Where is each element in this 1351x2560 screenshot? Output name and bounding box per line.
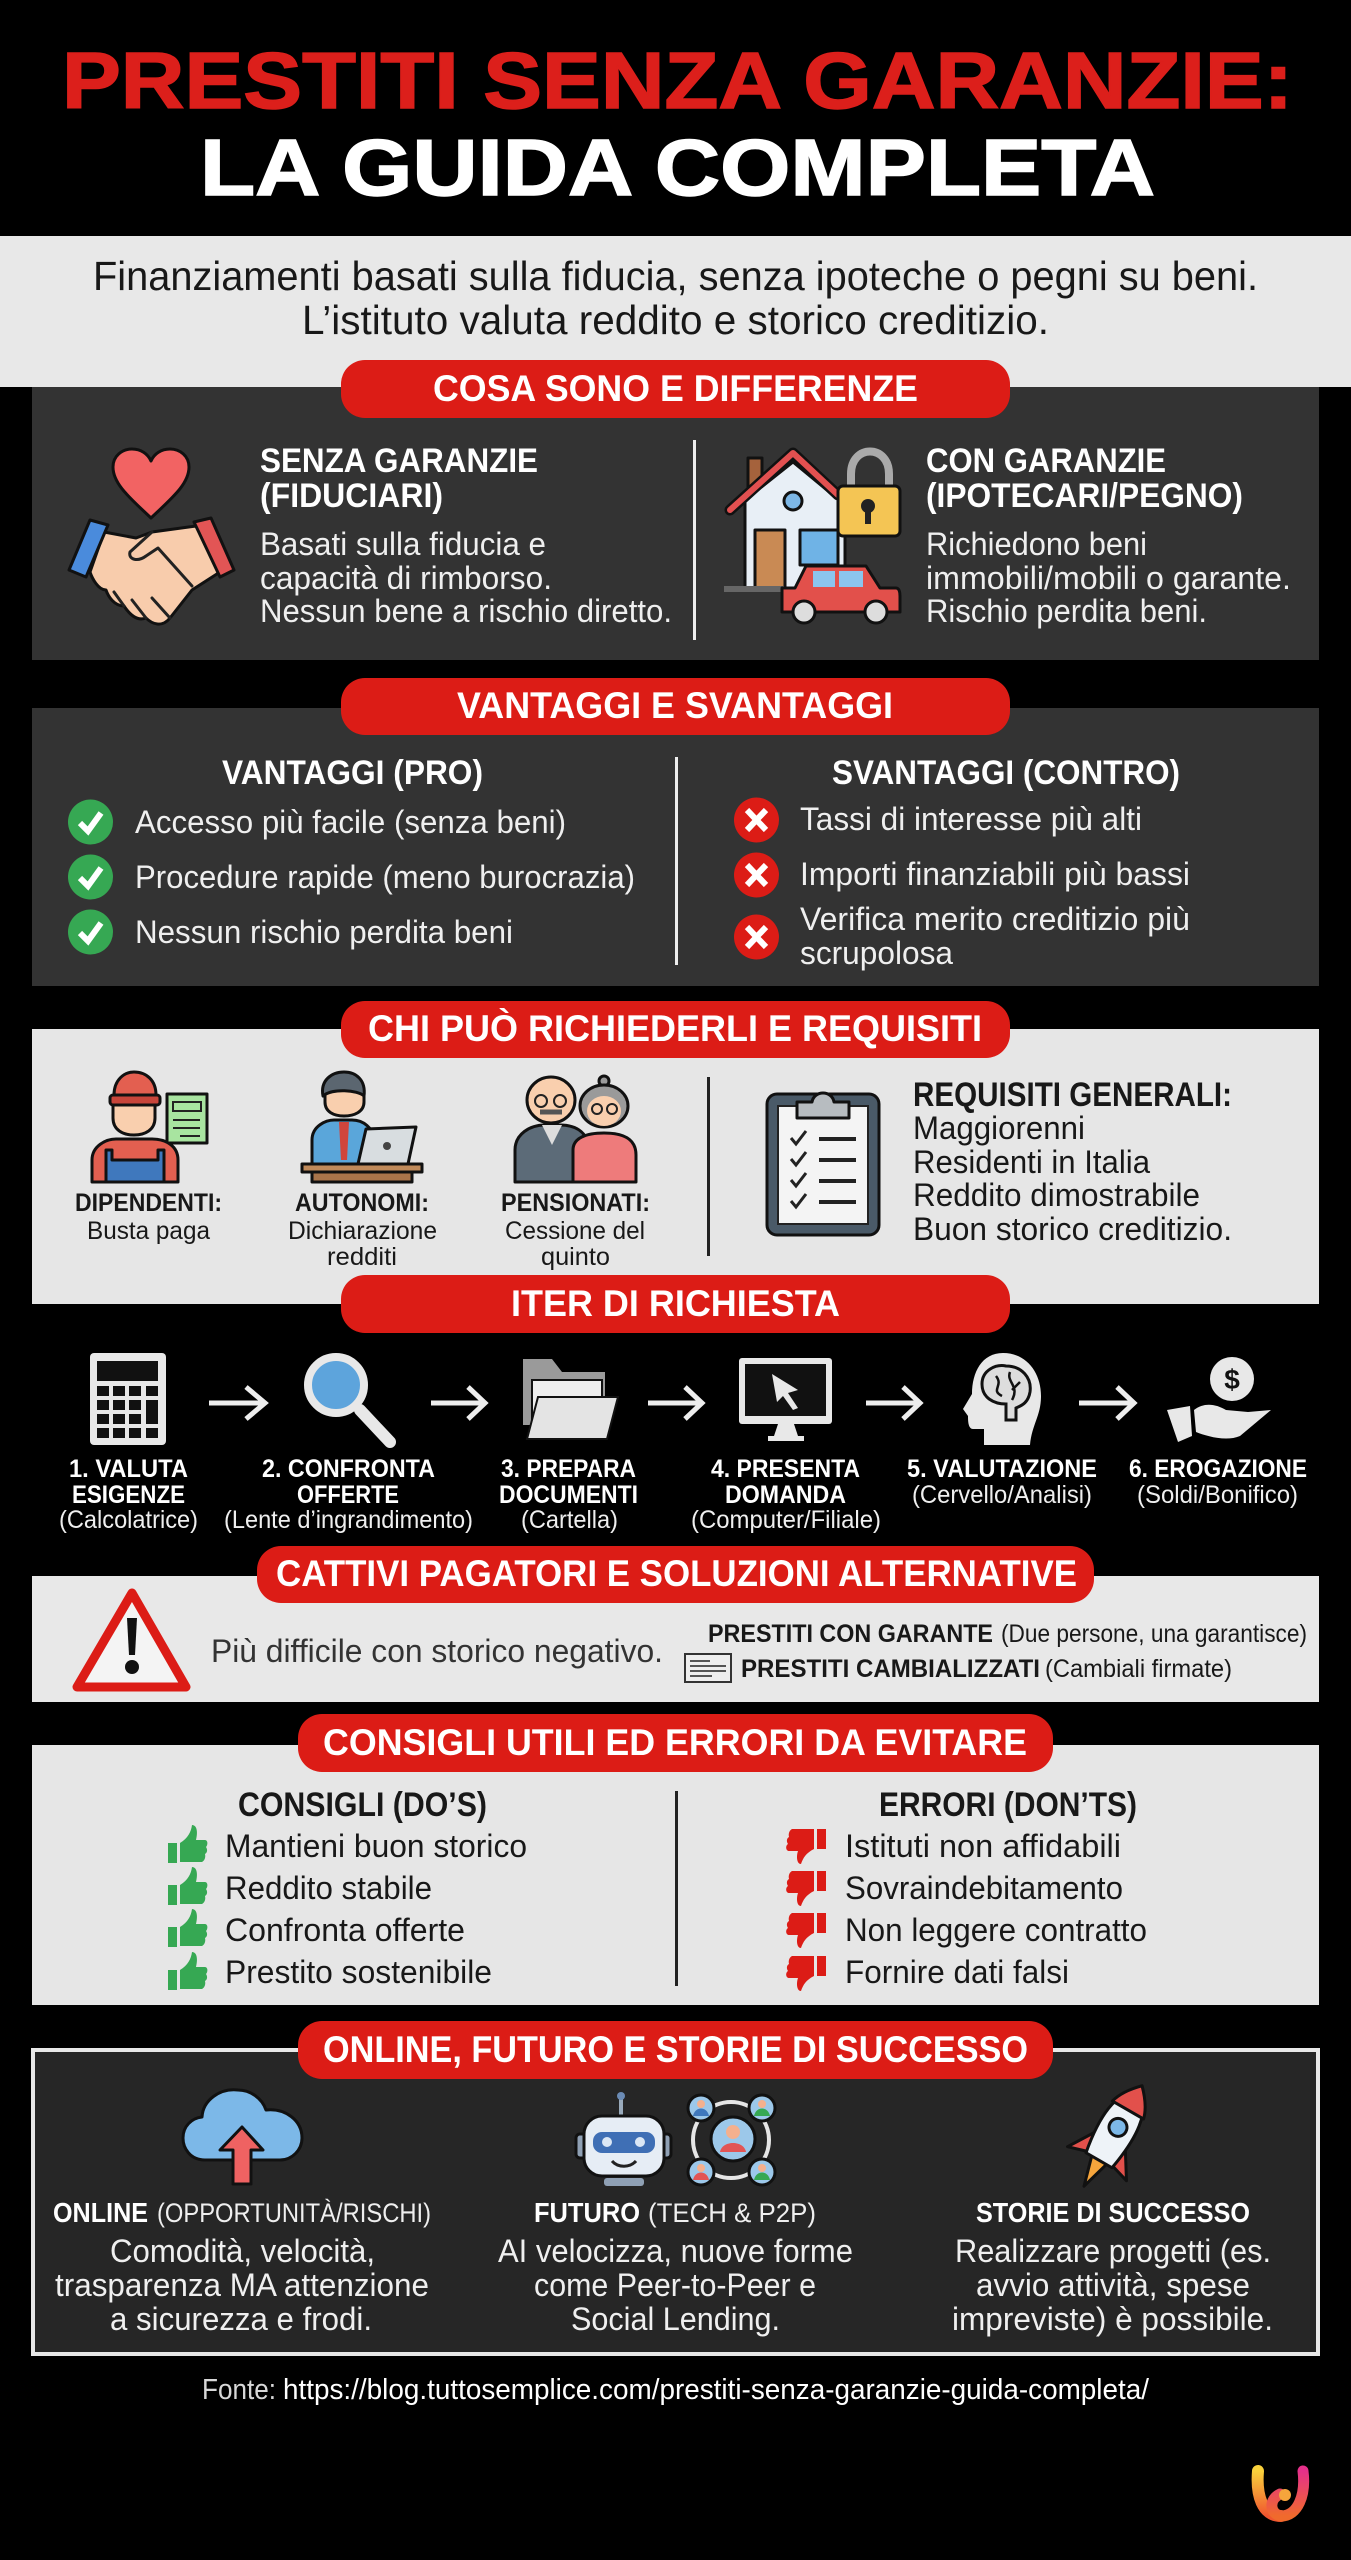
- icon: hand with coin: [1167, 1357, 1271, 1442]
- panel: online, futuro e storie di successo: [33, 2021, 1318, 2354]
- text: futuro: FUTURO: [534, 2197, 640, 2228]
- arrow: [648, 1387, 702, 1419]
- list: errori: Fornire dati falsi: [845, 1954, 1069, 1990]
- list: vantaggi: Accesso più facile (senza beni): [135, 804, 566, 840]
- arrow: [1079, 1387, 1134, 1419]
- step 4 label: DOMANDA: [725, 1481, 846, 1509]
- title: PRESTITI SENZA GARANZIE:: [62, 36, 1293, 125]
- panel: consigli utili ed errori da evitare: [32, 1714, 1319, 2005]
- list: errori: [786, 1786, 1147, 1991]
- source line: https://blog.tuttosemplice.com/prestiti-senza-garanzie-guida-completa/: [283, 2374, 1150, 2406]
- text: requisiti generali: Reddito dimostrabile: [913, 1177, 1200, 1213]
- heading pill: [341, 360, 1010, 418]
- text: requisiti generali: Buon storico creditizio.: [913, 1211, 1232, 1247]
- heading pill: ITER DI RICHIESTA: [511, 1283, 840, 1324]
- step 5 label: [907, 1455, 1097, 1509]
- heading pill: VANTAGGI E SVANTAGGI: [457, 685, 893, 726]
- icon: self-employed with laptop: [302, 1072, 422, 1182]
- list: svantaggi: [734, 754, 1190, 971]
- step 4 label: 4. PRESENTA: [711, 1455, 860, 1483]
- icon: computer: [739, 1358, 832, 1441]
- label: autonomi: Dichiarazione: [288, 1217, 437, 1245]
- icon: hand with coin: $: [1224, 1364, 1240, 1395]
- text: senza garanzie: (FIDUCIARI): [260, 477, 443, 515]
- text: storie di successo: STORIE DI SUCCESSO: [976, 2197, 1250, 2228]
- icon: head with brain: [963, 1353, 1041, 1445]
- label: pensionati: PENSIONATI:: [501, 1189, 650, 1217]
- text: con garanzie: Rischio perdita beni.: [926, 593, 1207, 629]
- heading pill: [257, 1546, 1094, 1603]
- subtitle band: L’istituto valuta reddito e storico creditizio.: [302, 297, 1049, 343]
- heading pill: CONSIGLI UTILI ED ERRORI DA EVITARE: [323, 1722, 1027, 1763]
- text: senza garanzie: [260, 442, 672, 629]
- step 5 label: (Cervello/Analisi): [912, 1481, 1092, 1509]
- step 1 label: ESIGENZE: [72, 1481, 185, 1509]
- icon: folder: [523, 1359, 618, 1439]
- heading pill: COSA SONO E DIFFERENZE: [433, 368, 918, 409]
- text: storie di successo: impreviste) è possibile.: [952, 2301, 1273, 2337]
- text: online: (OPPORTUNITÀ/RISCHI): [157, 2198, 431, 2228]
- icon: worker: [92, 1072, 207, 1182]
- label: pensionati: [501, 1189, 650, 1271]
- step 2 label: 2. CONFRONTA: [262, 1455, 435, 1483]
- arrow: [866, 1387, 920, 1419]
- text: futuro: Social Lending.: [571, 2301, 780, 2337]
- panel: cosa sono e differenze: [32, 360, 1319, 660]
- text: senza garanzie: SENZA GARANZIE: [260, 442, 538, 480]
- list: svantaggi: SVANTAGGI (CONTRO): [832, 754, 1180, 792]
- text: senza garanzie: Nessun bene a rischio diretto.: [260, 593, 672, 629]
- text: prestiti cambializzati: [741, 1655, 1232, 1683]
- list: consigli: Prestito sostenibile: [225, 1954, 492, 1990]
- icon: pensioners: [515, 1076, 636, 1182]
- text: prestiti con garante: (Due persone, una garantisce): [1001, 1620, 1307, 1648]
- text: storie di successo: avvio attività, spese: [976, 2267, 1250, 2303]
- heading pill: [298, 2021, 1053, 2079]
- list: errori: Istituti non affidabili: [845, 1828, 1121, 1864]
- text: requisiti generali: [913, 1076, 1232, 1247]
- text: senza garanzie: Basati sulla fiducia e: [260, 526, 546, 562]
- text: con garanzie: Richiedono beni: [926, 526, 1147, 562]
- heading pill: [341, 1275, 1010, 1333]
- section: iter di richiesta: [59, 1275, 1307, 1534]
- text: con garanzie: (IPOTECARI/PEGNO): [926, 477, 1243, 515]
- source line: Fonte:: [202, 2374, 276, 2406]
- list: svantaggi: scrupolosa: [800, 935, 953, 971]
- list: consigli: [168, 1786, 527, 1990]
- step 2 label: OFFERTE: [297, 1481, 399, 1509]
- text: storie di successo: Realizzare progetti (es.: [955, 2233, 1271, 2269]
- step 4 label: [691, 1455, 881, 1534]
- panel: chi può richiederli e requisiti: [32, 1001, 1319, 1304]
- label: dipendenti: DIPENDENTI:: [75, 1189, 222, 1217]
- label: dipendenti: Busta paga: [87, 1217, 210, 1245]
- icon: peer-to-peer network: [688, 2095, 775, 2185]
- icon: heart and handshake: [69, 449, 234, 624]
- text: online: a sicurezza e frodi.: [110, 2301, 372, 2337]
- icon: rocket: [1055, 2069, 1171, 2203]
- text: online: trasparenza MA attenzione: [55, 2267, 429, 2303]
- text: requisiti generali: Residenti in Italia: [913, 1144, 1150, 1180]
- step 6 label: (Soldi/Bonifico): [1137, 1481, 1298, 1509]
- step 2 label: (Lente d’ingrandimento): [224, 1506, 473, 1534]
- list: consigli: Confronta offerte: [225, 1912, 465, 1948]
- icon: house, padlock and car: [724, 452, 900, 623]
- icon: robot: [576, 2092, 671, 2186]
- text: futuro: AI velocizza, nuove forme: [498, 2233, 853, 2269]
- label: pensionati: Cessione del: [505, 1217, 645, 1245]
- step 5 label: 5. VALUTAZIONE: [907, 1455, 1097, 1483]
- step 4 label: (Computer/Filiale): [691, 1506, 881, 1534]
- text: futuro: come Peer-to-Peer e: [534, 2267, 816, 2303]
- text: online: [53, 2197, 431, 2337]
- text: prestiti con garante: [708, 1620, 1307, 1648]
- list: vantaggi: Procedure rapide (meno burocrazia): [135, 859, 635, 895]
- icon: clipboard: [767, 1093, 879, 1235]
- subtitle band: Finanziamenti basati sulla fiducia, senza ipoteche o pegni su beni.: [93, 253, 1258, 299]
- step 1 label: [59, 1455, 198, 1534]
- step 6 label: [1129, 1455, 1307, 1509]
- label: dipendenti: [75, 1189, 222, 1245]
- list: vantaggi: [68, 754, 635, 954]
- logo: [1258, 2471, 1304, 2516]
- list: errori: Sovraindebitamento: [845, 1870, 1123, 1906]
- icon: cloud upload: [183, 2090, 302, 2184]
- list: svantaggi: Tassi di interesse più alti: [800, 801, 1142, 837]
- text: requisiti generali: REQUISITI GENERALI:: [913, 1076, 1232, 1114]
- text: online: Comodità, velocità,: [110, 2233, 375, 2269]
- text: senza garanzie: capacità di rimborso.: [260, 560, 552, 596]
- arrow: [431, 1387, 485, 1419]
- label: pensionati: quinto: [541, 1243, 610, 1271]
- step 1 label: (Calcolatrice): [59, 1506, 198, 1534]
- list: errori: Non leggere contratto: [845, 1912, 1147, 1948]
- title: [62, 36, 1293, 212]
- icon: magnifying glass: [308, 1357, 390, 1442]
- list: consigli: Mantieni buon storico: [225, 1828, 527, 1864]
- text: prestiti cambializzati: PRESTITI CAMBIALIZZATI: [741, 1655, 1040, 1683]
- subtitle band: [0, 236, 1351, 387]
- text: requisiti generali: Maggiorenni: [913, 1110, 1085, 1146]
- step 3 label: (Cartella): [521, 1506, 618, 1534]
- list: vantaggi: Nessun rischio perdita beni: [135, 914, 513, 950]
- step 6 label: 6. EROGAZIONE: [1129, 1455, 1307, 1483]
- heading pill: CATTIVI PAGATORI E SOLUZIONI ALTERNATIVE: [276, 1553, 1077, 1594]
- heading pill: ONLINE, FUTURO E STORIE DI SUCCESSO: [323, 2029, 1028, 2070]
- step 3 label: [499, 1455, 638, 1534]
- heading pill: CHI PUÒ RICHIEDERLI E REQUISITI: [368, 1007, 982, 1049]
- list: consigli: CONSIGLI (DO’S): [238, 1786, 487, 1824]
- arrow: [209, 1387, 265, 1419]
- list: consigli: Reddito stabile: [225, 1870, 432, 1906]
- icon: warning triangle: [77, 1593, 186, 1687]
- text: futuro: [498, 2197, 853, 2337]
- step 3 label: DOCUMENTI: [499, 1481, 638, 1509]
- icon: signed promissory note: [685, 1654, 731, 1682]
- step 2 label: [224, 1455, 473, 1534]
- heading pill: [298, 1714, 1053, 1772]
- step 1 label: 1. VALUTA: [69, 1455, 188, 1483]
- label: autonomi: redditi: [327, 1243, 397, 1271]
- step 3 label: 3. PREPARA: [501, 1455, 636, 1483]
- list: vantaggi: VANTAGGI (PRO): [222, 754, 483, 792]
- text: prestiti cambializzati: (Cambiali firmate): [1045, 1655, 1232, 1683]
- text: prestiti con garante: PRESTITI CON GARANTE: [708, 1620, 993, 1648]
- panel: vantaggi e svantaggi: [32, 678, 1319, 986]
- icon: calculator: [90, 1353, 166, 1445]
- text: futuro: (TECH & P2P): [648, 2198, 816, 2228]
- list: errori: ERRORI (DON’TS): [879, 1786, 1137, 1824]
- heading pill: [341, 678, 1010, 735]
- list: svantaggi: Verifica merito creditizio più: [800, 901, 1190, 937]
- label: autonomi: [288, 1189, 437, 1271]
- text: storie di successo: [952, 2197, 1273, 2337]
- text: online: ONLINE: [53, 2197, 148, 2228]
- text: con garanzie: CON GARANZIE: [926, 442, 1166, 480]
- text: con garanzie: [926, 442, 1291, 629]
- title: LA GUIDA COMPLETA: [200, 123, 1155, 212]
- list: svantaggi: Importi finanziabili più bassi: [800, 856, 1190, 892]
- label: autonomi: AUTONOMI:: [295, 1189, 429, 1217]
- text: con garanzie: immobili/mobili o garante.: [926, 560, 1291, 596]
- text: storico negativo: Più difficile con storico negativo.: [211, 1633, 663, 1669]
- panel: cattivi pagatori e soluzioni alternative: [32, 1546, 1319, 1702]
- heading pill: [341, 1001, 1010, 1058]
